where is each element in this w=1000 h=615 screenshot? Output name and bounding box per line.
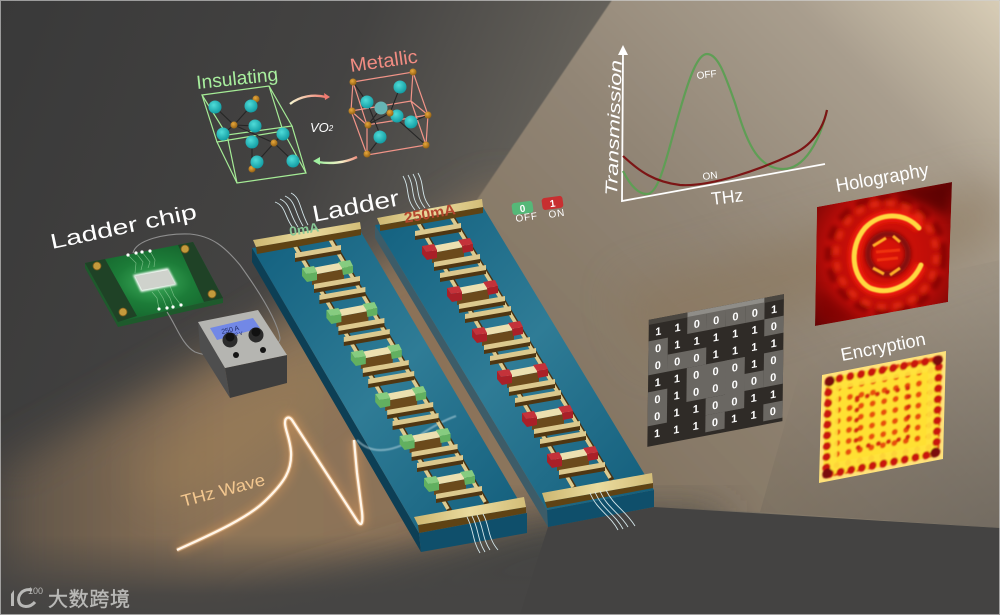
- right connector wires: [403, 173, 635, 530]
- label: Encryption: Encryption: [839, 329, 927, 365]
- legend: 0 OFF / 1 ON: 0: [519, 204, 527, 215]
- binary coding matrix: 0: [694, 318, 700, 331]
- power supply box: 250 A: [221, 325, 240, 336]
- chart axes: [622, 52, 825, 201]
- binary coding matrix: 0: [712, 399, 718, 413]
- binary coding matrix: 1: [655, 325, 661, 339]
- right ladder device: 250 mA: [375, 173, 654, 530]
- insulating cube: [202, 86, 306, 183]
- legend: 0 OFF / 1 ON: OFF: [515, 211, 539, 225]
- binary coding matrix: 0: [712, 382, 719, 396]
- binary coding matrix: 1: [694, 335, 700, 348]
- left ladder bus bars: [253, 222, 526, 533]
- binary coding matrix: 1: [655, 376, 661, 390]
- binary coding matrix: 1: [674, 390, 680, 403]
- binary coding matrix: 1: [673, 407, 680, 420]
- label: Ladder chip: Ladder chip: [48, 200, 199, 254]
- crystal: insulating phase: [195, 65, 306, 183]
- binary coding matrix: 1: [731, 413, 737, 426]
- hologram image: [815, 182, 952, 326]
- binary coding matrix: 0: [713, 314, 719, 328]
- binary coding matrix: 0: [655, 359, 661, 373]
- binary coding matrix: 0: [731, 396, 738, 409]
- right ladder bus bars: [377, 199, 653, 508]
- ON label: ON: [702, 170, 718, 183]
- binary coding matrix: 1: [674, 322, 681, 335]
- THz wave: [177, 418, 362, 550]
- binary coding matrix: 0: [654, 410, 660, 424]
- binary coding matrix: 0: [771, 320, 777, 334]
- connecting wires: [133, 234, 280, 356]
- binary coding matrix: 1: [693, 420, 699, 433]
- y axis label: Transmission: [602, 60, 626, 196]
- binary coding matrix: 1: [713, 331, 719, 345]
- binary coding matrix: 0: [654, 393, 661, 407]
- binary coding matrix: 0: [770, 354, 777, 368]
- encryption image: [819, 351, 946, 483]
- circuit board: [85, 242, 223, 327]
- left ladder rungs with green OFF switches: [295, 245, 482, 503]
- binary coding matrix: 0: [712, 416, 718, 430]
- binary coding matrix: 1: [751, 392, 757, 405]
- binary coding matrix: 1: [751, 358, 757, 371]
- watermark logo: 100: [28, 586, 43, 596]
- arrows between phases with VO2 label: [290, 93, 357, 165]
- binary coding matrix: 0: [732, 379, 738, 392]
- right substrate: [375, 207, 654, 527]
- right ladder rails: [418, 215, 612, 489]
- OFF curve: [623, 54, 827, 194]
- watermark logo: 大数跨境: [48, 588, 130, 611]
- label: THz Wave: THz Wave: [179, 470, 267, 511]
- left connector wires: [275, 193, 498, 553]
- label: Metallic: Metallic: [349, 47, 419, 77]
- right ladder rungs with red ON switches: [415, 223, 605, 479]
- x axis label: THz: [710, 185, 744, 209]
- binary coding matrix: [647, 294, 784, 447]
- binary coding matrix: 1: [674, 373, 680, 386]
- binary coding matrix: 1: [673, 424, 679, 437]
- binary coding matrix: 1: [771, 303, 777, 317]
- binary coding matrix: 1: [771, 337, 777, 351]
- binary coding matrix: 1: [751, 341, 758, 354]
- left ladder device: 0 mA: [252, 193, 527, 553]
- binary coding matrix: 1: [713, 348, 719, 362]
- binary coding matrix: 0: [712, 365, 719, 379]
- binary coding matrix: 1: [674, 339, 681, 352]
- binary coding matrix: 0: [693, 369, 699, 382]
- binary coding matrix: 0: [770, 405, 776, 419]
- ladder chip assembly: [48, 200, 287, 398]
- holography panel: [815, 160, 952, 326]
- arrows between phases with VO2 label: 2: [328, 124, 334, 133]
- binary coding matrix: 1: [732, 328, 738, 341]
- OFF label: OFF: [696, 69, 717, 82]
- label: Holography: Holography: [834, 160, 931, 197]
- binary coding matrix: 0: [693, 352, 700, 365]
- transmission chart: [602, 45, 827, 209]
- watermark logo: [11, 586, 130, 611]
- left substrate: [252, 232, 527, 552]
- binary coding matrix: 1: [693, 403, 699, 416]
- legend: 0 OFF / 1 ON: [511, 196, 566, 225]
- binary coding matrix: 0: [732, 362, 738, 375]
- binary coding matrix: 1: [770, 388, 776, 402]
- binary coding matrix: 0: [693, 386, 699, 399]
- legend: 0 OFF / 1 ON: ON: [548, 208, 566, 221]
- binary coding matrix: 1: [654, 427, 660, 441]
- binary coding matrix: 1: [732, 345, 738, 358]
- label: Ladder: Ladder: [310, 185, 402, 227]
- left ladder rails: [293, 236, 487, 511]
- binary coding matrix: 0: [732, 311, 739, 324]
- encryption panel: [819, 329, 946, 483]
- power supply box: [198, 310, 287, 398]
- wave passing arrow: [357, 416, 456, 450]
- binary coding matrix: 0: [655, 342, 661, 356]
- legend: 0 OFF / 1 ON: 1: [549, 199, 557, 210]
- binary coding matrix: 1: [751, 324, 758, 337]
- label: Insulating: Insulating: [195, 65, 279, 94]
- binary coding matrix: 0: [770, 371, 776, 385]
- 250mA label: 250mA: [403, 201, 457, 227]
- arrows between phases with VO2 label: VO: [310, 120, 329, 135]
- 0mA label: 0mA: [288, 219, 321, 239]
- binary coding matrix: 0: [752, 307, 758, 320]
- binary coding matrix: 1: [750, 409, 757, 422]
- power supply box: 32 V: [232, 331, 244, 339]
- binary coding matrix: 0: [751, 375, 757, 388]
- metallic cube: [348, 68, 432, 158]
- binary coding matrix: 0: [674, 356, 680, 369]
- ON curve: [623, 110, 827, 185]
- crystal: metallic phase: [348, 47, 432, 158]
